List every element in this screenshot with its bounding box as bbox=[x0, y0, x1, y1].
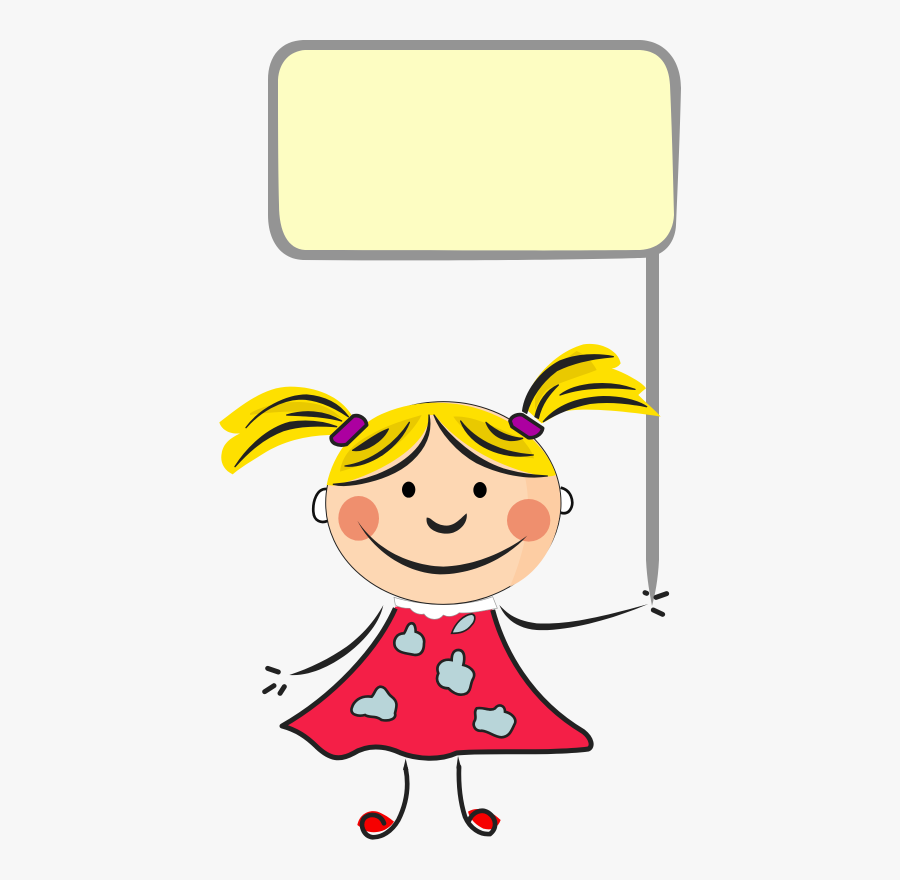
sign stick bbox=[646, 250, 659, 606]
dress spot 3 bbox=[437, 650, 474, 695]
left eye bbox=[402, 482, 415, 498]
head bbox=[219, 344, 661, 604]
left arm bbox=[289, 605, 383, 675]
legs and shoes bbox=[357, 756, 501, 837]
right pigtail bbox=[523, 344, 661, 423]
right ear bbox=[561, 488, 572, 513]
sign yellow panel bbox=[278, 50, 674, 250]
face shading bbox=[510, 475, 560, 587]
left cheek bbox=[338, 496, 379, 541]
right cheek bbox=[507, 499, 550, 542]
right leg bbox=[456, 756, 495, 834]
collar bbox=[394, 597, 497, 619]
right hair band bbox=[510, 415, 543, 438]
dress bbox=[281, 597, 592, 758]
arms and hands bbox=[265, 593, 667, 693]
left pigtail bbox=[219, 387, 352, 474]
dress body bbox=[281, 607, 592, 758]
left hair band bbox=[331, 416, 367, 445]
dress outline bbox=[282, 608, 591, 758]
hair fringe bbox=[327, 403, 556, 486]
sign frame bbox=[268, 40, 681, 260]
right shoe bbox=[468, 809, 501, 829]
dress spot 1 bbox=[394, 623, 424, 655]
mouth bbox=[357, 521, 527, 574]
left hand fingers bbox=[265, 668, 284, 693]
right eye bbox=[473, 482, 487, 498]
right arm bbox=[499, 604, 648, 630]
blank sign on a stick bbox=[268, 40, 681, 606]
left leg bbox=[362, 759, 408, 837]
dress spot 4 bbox=[351, 687, 396, 720]
dress spot 2 bbox=[452, 614, 475, 633]
face bbox=[326, 402, 561, 604]
left ear bbox=[313, 489, 327, 522]
left shoe bbox=[357, 811, 394, 832]
right hand fingers bbox=[645, 593, 667, 614]
dress spot 5 bbox=[474, 705, 515, 737]
nose bbox=[427, 513, 467, 534]
